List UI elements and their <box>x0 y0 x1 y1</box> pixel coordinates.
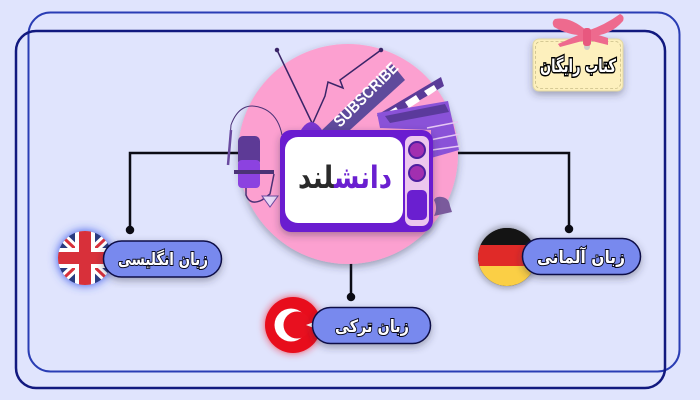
label pill <box>104 241 222 277</box>
item: Turkish <box>265 297 430 353</box>
central illustration: media circle <box>228 44 460 264</box>
icon: bell <box>434 197 452 216</box>
label pill <box>522 238 640 274</box>
item: English <box>50 225 222 291</box>
icon: Germany flag <box>478 228 536 286</box>
label pill <box>312 308 430 344</box>
pink circle <box>238 44 458 264</box>
icon: microphone <box>228 106 282 207</box>
icon: clapperboard <box>377 77 460 158</box>
subscribe banner: SUBSCRIBE <box>331 59 402 131</box>
label text: زبان ترکی <box>335 317 409 337</box>
item: German <box>478 228 640 286</box>
television <box>280 130 433 232</box>
connector lines <box>127 153 572 300</box>
logo text: دانشلند <box>298 160 392 196</box>
icon: Turkey flag <box>265 297 321 353</box>
icon: antenna <box>276 48 382 130</box>
tag: free book <box>533 14 624 91</box>
label text: زبان انگلیسی <box>118 249 208 270</box>
icon: UK flag <box>50 225 120 291</box>
icon: ribbon bow <box>553 14 624 47</box>
tag card <box>533 39 623 91</box>
tag text: کتاب رایگان <box>540 55 616 77</box>
label text: زبان آلمانی <box>537 246 625 268</box>
